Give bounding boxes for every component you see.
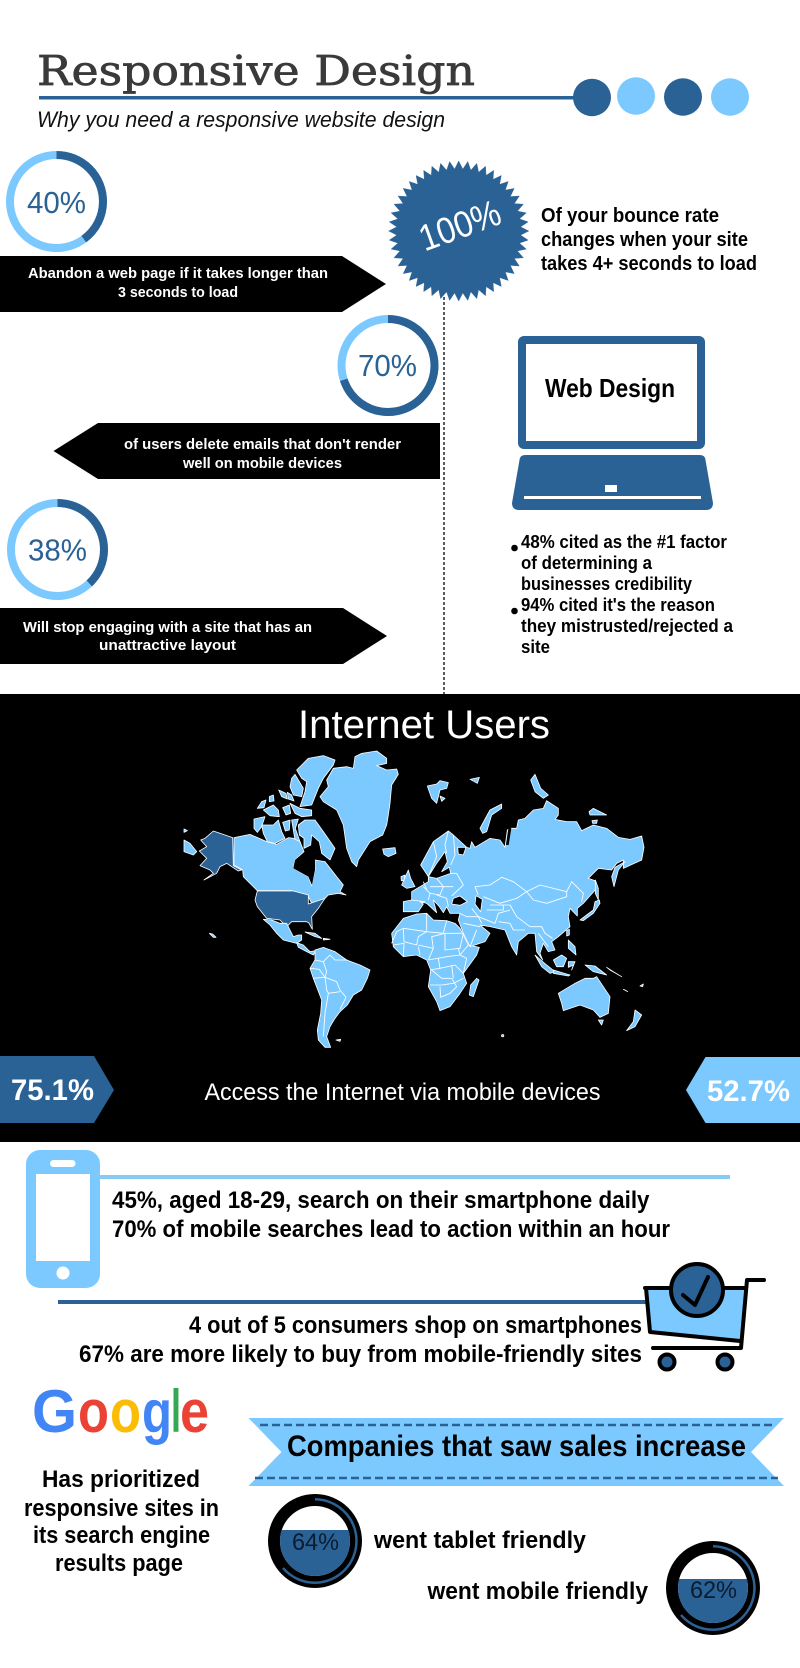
- arrow: stop engaging: unattractive layout: [99, 637, 236, 654]
- logo: google: e: [180, 1378, 209, 1445]
- gauge: 62%: [666, 1541, 760, 1635]
- bullet list: web design facts: of determining a: [521, 553, 653, 573]
- shopping stats text: [79, 1312, 642, 1368]
- icon: shopping cart: [645, 1264, 764, 1370]
- shopping stats text: 4 out of 5 consumers shop on smartphones: [189, 1312, 642, 1339]
- world map: [184, 751, 644, 1047]
- stat: 40% ring: 40%: [27, 185, 86, 220]
- logo: google: o: [78, 1378, 109, 1445]
- google text: [24, 1466, 219, 1577]
- icon: laptop: [512, 340, 713, 510]
- badge: 100%: [389, 161, 529, 301]
- bounce rate text: [541, 205, 757, 275]
- logo: google: o: [110, 1378, 141, 1445]
- logo: google: g: [142, 1378, 172, 1445]
- shopping rule: [58, 1300, 648, 1304]
- heading: internet users: Internet Users: [298, 703, 550, 747]
- subtitle: Why you need a responsive website design: [37, 107, 445, 132]
- arrow: abandon web page: 3 seconds to load: [118, 284, 238, 301]
- bullet list: web design facts: businesses credibility: [521, 574, 692, 594]
- bullet list: web design facts: 94% cited it's the reason: [521, 595, 715, 615]
- stat: 70% ring: 70%: [358, 348, 417, 383]
- bounce rate text: changes when your site: [541, 229, 748, 251]
- dotted divider: [443, 297, 445, 694]
- arrow: stop engaging: Will stop engaging with a site that has an: [23, 619, 312, 636]
- caption: mobile access: Access the Internet via mobile devices: [204, 1079, 600, 1106]
- shopping stats text: 67% are more likely to buy from mobile-friendly sites: [79, 1341, 642, 1368]
- smartphone stats text: 70% of mobile searches lead to action within an hour: [112, 1216, 670, 1243]
- smartphone rule: [100, 1175, 730, 1179]
- tag: 75.1%: 75.1%: [11, 1074, 94, 1107]
- gauge: 64%: 64%: [292, 1529, 339, 1556]
- logo: google: [32, 1378, 209, 1445]
- smartphone stats text: [112, 1187, 670, 1243]
- logo: google: l: [171, 1378, 181, 1445]
- tag: 52.7%: [686, 1057, 800, 1123]
- label: mobile friendly: went mobile friendly: [427, 1578, 649, 1605]
- google text: its search engine: [33, 1522, 210, 1549]
- arrow: abandon web page: [0, 256, 386, 312]
- bullet list: web design facts: they mistrusted/rejected a: [521, 616, 734, 636]
- stat: 38% ring: 38%: [28, 532, 87, 568]
- google text: responsive sites in: [24, 1495, 219, 1522]
- google text: results page: [55, 1550, 183, 1577]
- ribbon: companies that saw sales increase: Companies that saw sales increase: [287, 1430, 746, 1463]
- google text: Has prioritized: [42, 1466, 200, 1493]
- bounce rate text: Of your bounce rate: [541, 205, 719, 227]
- arrow: abandon web page: Abandon a web page if it takes longer than: [28, 265, 328, 282]
- tag: 75.1%: [0, 1056, 114, 1123]
- ribbon: companies that saw sales increase: [248, 1418, 784, 1486]
- icon: laptop: Web Design: [545, 373, 675, 403]
- header rule with dots: [39, 77, 749, 116]
- gauge: 64%: [268, 1494, 362, 1588]
- arrow: delete emails: [54, 423, 440, 479]
- smartphone stats text: 45%, aged 18-29, search on their smartphone daily: [112, 1187, 650, 1214]
- panel: internet users: [0, 694, 800, 1142]
- bullet list: web design facts: [511, 532, 734, 657]
- gauge: 62%: 62%: [690, 1577, 737, 1604]
- title: Responsive Design: [37, 47, 475, 95]
- stat: 38% ring: [11, 503, 104, 596]
- icon: smartphone: [26, 1150, 100, 1288]
- tag: 52.7%: 52.7%: [707, 1075, 790, 1108]
- badge: 100%: 100%: [413, 192, 506, 259]
- arrow: delete emails: well on mobile devices: [182, 455, 342, 472]
- bullet list: web design facts: site: [521, 637, 550, 657]
- bullet list: web design facts: 48% cited as the #1 factor: [521, 532, 727, 552]
- stat: 40% ring: [10, 155, 103, 248]
- bounce rate text: takes 4+ seconds to load: [541, 253, 757, 275]
- arrow: delete emails: of users delete emails that don't render: [124, 436, 401, 453]
- logo: google: G: [32, 1378, 77, 1445]
- label: tablet friendly: went tablet friendly: [373, 1527, 587, 1554]
- stat: 70% ring: [342, 319, 434, 412]
- arrow: stop engaging: [0, 608, 387, 664]
